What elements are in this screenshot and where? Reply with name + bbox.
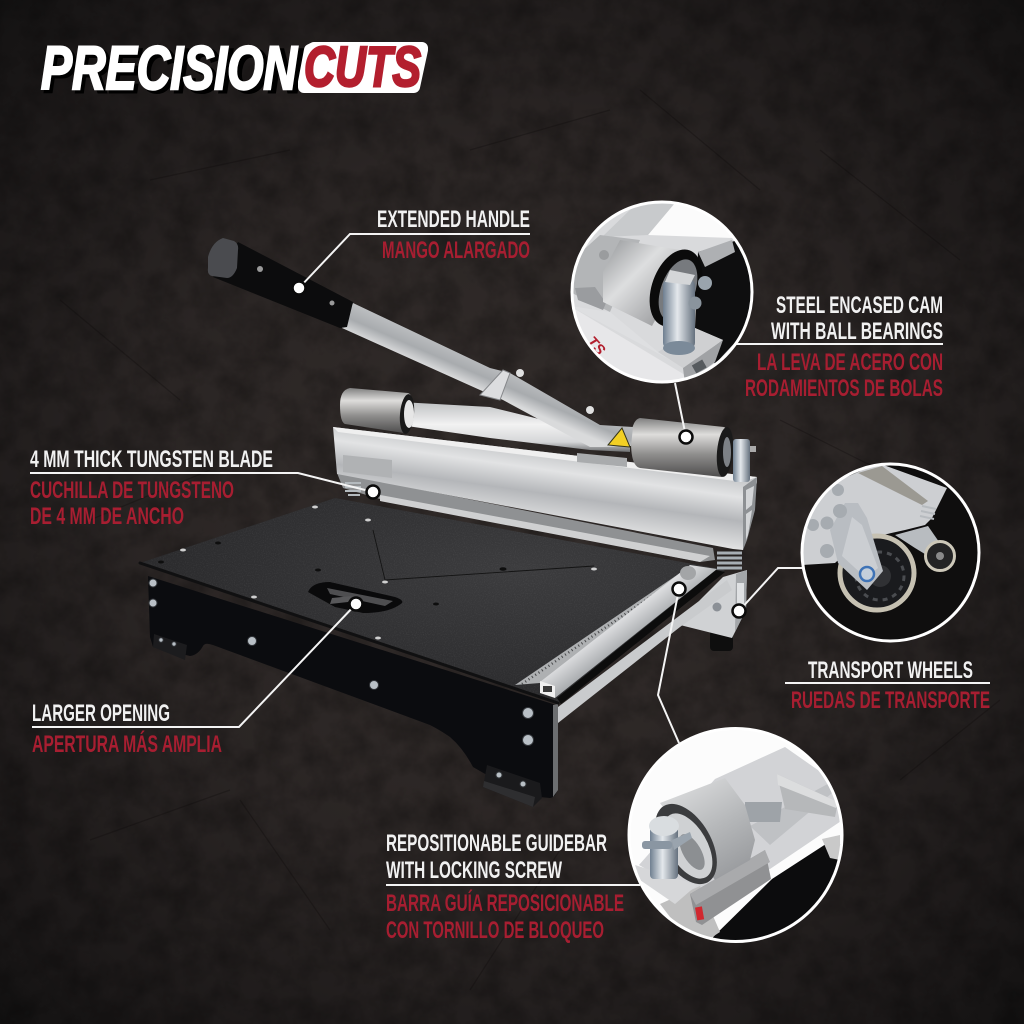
label: repositionable guidebar: REPOSITIONABLE GUIDEBAR — [386, 830, 607, 857]
black handle grip — [208, 238, 353, 328]
label: larger opening — [32, 700, 222, 758]
front black skirt — [148, 576, 558, 807]
label: tungsten blade — [30, 446, 273, 530]
leader lines — [30, 234, 990, 885]
speckled table top — [130, 490, 730, 710]
label: repositionable guidebar: WITH LOCKING SCREW — [386, 857, 562, 884]
detail circle: transport wheels — [800, 462, 982, 644]
label: transport wheels — [791, 657, 990, 714]
label: extended handle — [377, 206, 530, 264]
aluminium head beam — [333, 427, 757, 550]
label: repositionable guidebar: CON TORNILLO DE BLOQUEO — [386, 917, 604, 944]
label: tungsten blade: 4 MM THICK TUNGSTEN BLADE — [30, 446, 273, 473]
skirt bolts — [149, 579, 534, 787]
label: repositionable guidebar: BARRA GUÍA REPOSICIONABLE — [386, 889, 624, 917]
label: larger opening: APERTURA MÁS AMPLIA — [32, 730, 222, 758]
label: steel encased cam — [745, 292, 943, 402]
larger opening slot — [308, 582, 402, 613]
rear tube rod — [400, 402, 630, 467]
logo: Precision Cuts: PRECISION — [41, 34, 298, 102]
right steel cam — [631, 418, 735, 478]
label: extended handle: EXTENDED HANDLE — [377, 206, 530, 233]
black rail gap — [557, 570, 725, 704]
label: tungsten blade: CUCHILLA DE TUNGSTENO — [30, 477, 234, 504]
label: repositionable guidebar — [386, 830, 624, 944]
logo: Precision Cuts: CUTS — [304, 35, 421, 99]
detail circle: steel cam — [570, 200, 754, 384]
callout dots — [292, 282, 746, 618]
product: bar shear machine — [130, 238, 757, 807]
cam pin — [733, 439, 756, 482]
right support frame and foot — [680, 570, 747, 651]
label: extended handle: MANGO ALARGADO — [382, 237, 530, 264]
long handle arm — [342, 303, 633, 447]
detail circle: steel cam: TS — [583, 333, 608, 359]
warning sticker — [608, 428, 630, 447]
logo: Precision Cuts: PRECISION — [44, 37, 303, 105]
blade strip and springs — [337, 473, 742, 568]
lower rail — [558, 580, 732, 723]
label: larger opening: LARGER OPENING — [32, 700, 170, 727]
ruler and guide bar — [515, 565, 717, 698]
label: tungsten blade: DE 4 MM DE ANCHO — [30, 503, 184, 530]
detail circle: guidebar locking screw — [628, 728, 844, 945]
left steel cam — [340, 388, 416, 435]
